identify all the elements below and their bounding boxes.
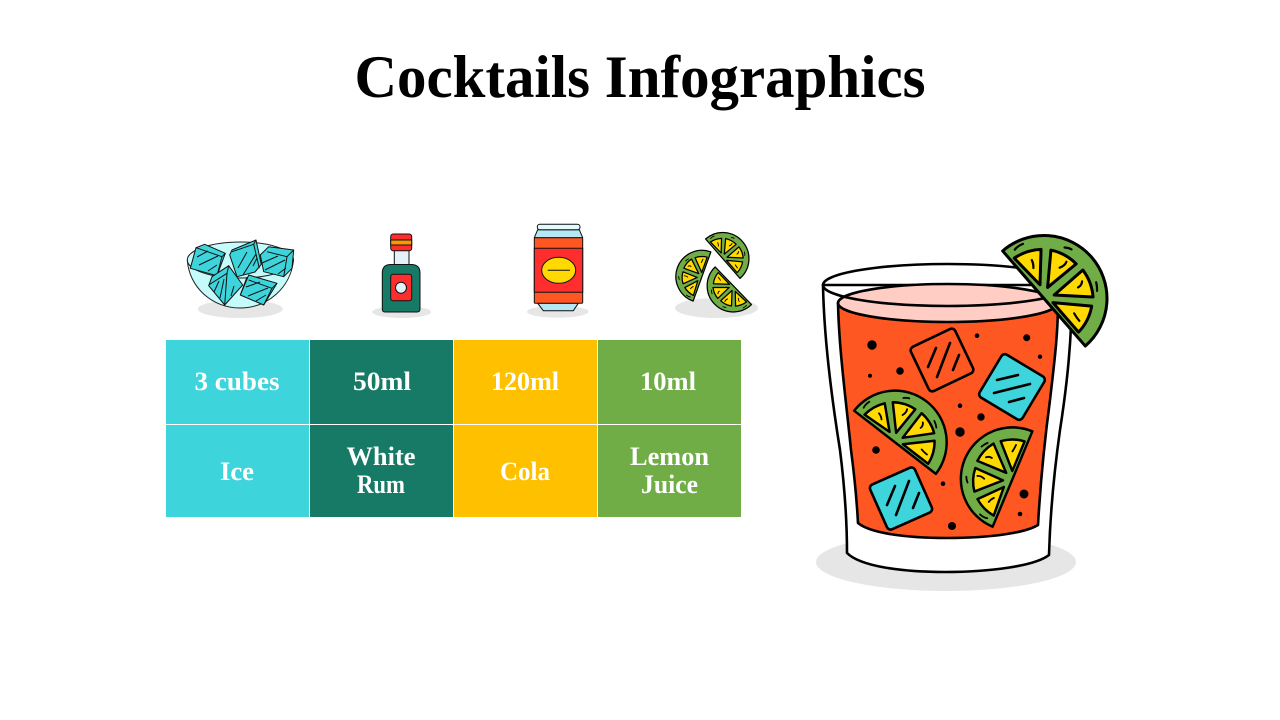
column: lemon juice bbox=[598, 340, 741, 517]
drink surface bbox=[838, 284, 1058, 322]
drink liquid bbox=[838, 303, 1058, 538]
column: cola: Cola bbox=[500, 457, 550, 486]
column: ice: 3 cubes bbox=[194, 367, 280, 396]
column: lemon juice: Juice bbox=[641, 470, 698, 499]
glass shadow bbox=[816, 533, 1076, 591]
column: cola bbox=[454, 340, 597, 517]
bubbles bbox=[867, 333, 1042, 530]
column: white rum: 50ml bbox=[353, 367, 411, 396]
column: ice: Ice bbox=[220, 457, 254, 486]
title: Cocktails Infographics bbox=[354, 44, 926, 110]
column: ice bbox=[166, 340, 309, 517]
lime slice in drink right bbox=[945, 411, 1032, 527]
icon: bowl of ice cubes bbox=[187, 240, 294, 318]
icon: lime slices bbox=[669, 222, 760, 323]
column: white rum: Rum bbox=[357, 470, 405, 499]
illustration: cocktail glass bbox=[816, 210, 1133, 591]
icon: rum bottle bbox=[372, 234, 431, 318]
column: white rum bbox=[310, 340, 453, 517]
ice cube: cyan left bbox=[869, 466, 933, 531]
column: lemon juice: 10ml bbox=[640, 367, 696, 396]
ice cube: orange bbox=[909, 327, 975, 393]
table bbox=[166, 340, 741, 517]
lime slice in drink left bbox=[854, 370, 967, 474]
column: white rum: White bbox=[346, 442, 416, 471]
lime slice on rim bbox=[1003, 210, 1133, 346]
icon: cola can bbox=[527, 224, 588, 318]
column: lemon juice: Lemon bbox=[630, 442, 710, 471]
column: cola: 120ml bbox=[491, 367, 559, 396]
glass rim bbox=[823, 264, 1072, 306]
glass body bbox=[823, 285, 1072, 572]
ice cube: cyan right bbox=[978, 353, 1046, 421]
